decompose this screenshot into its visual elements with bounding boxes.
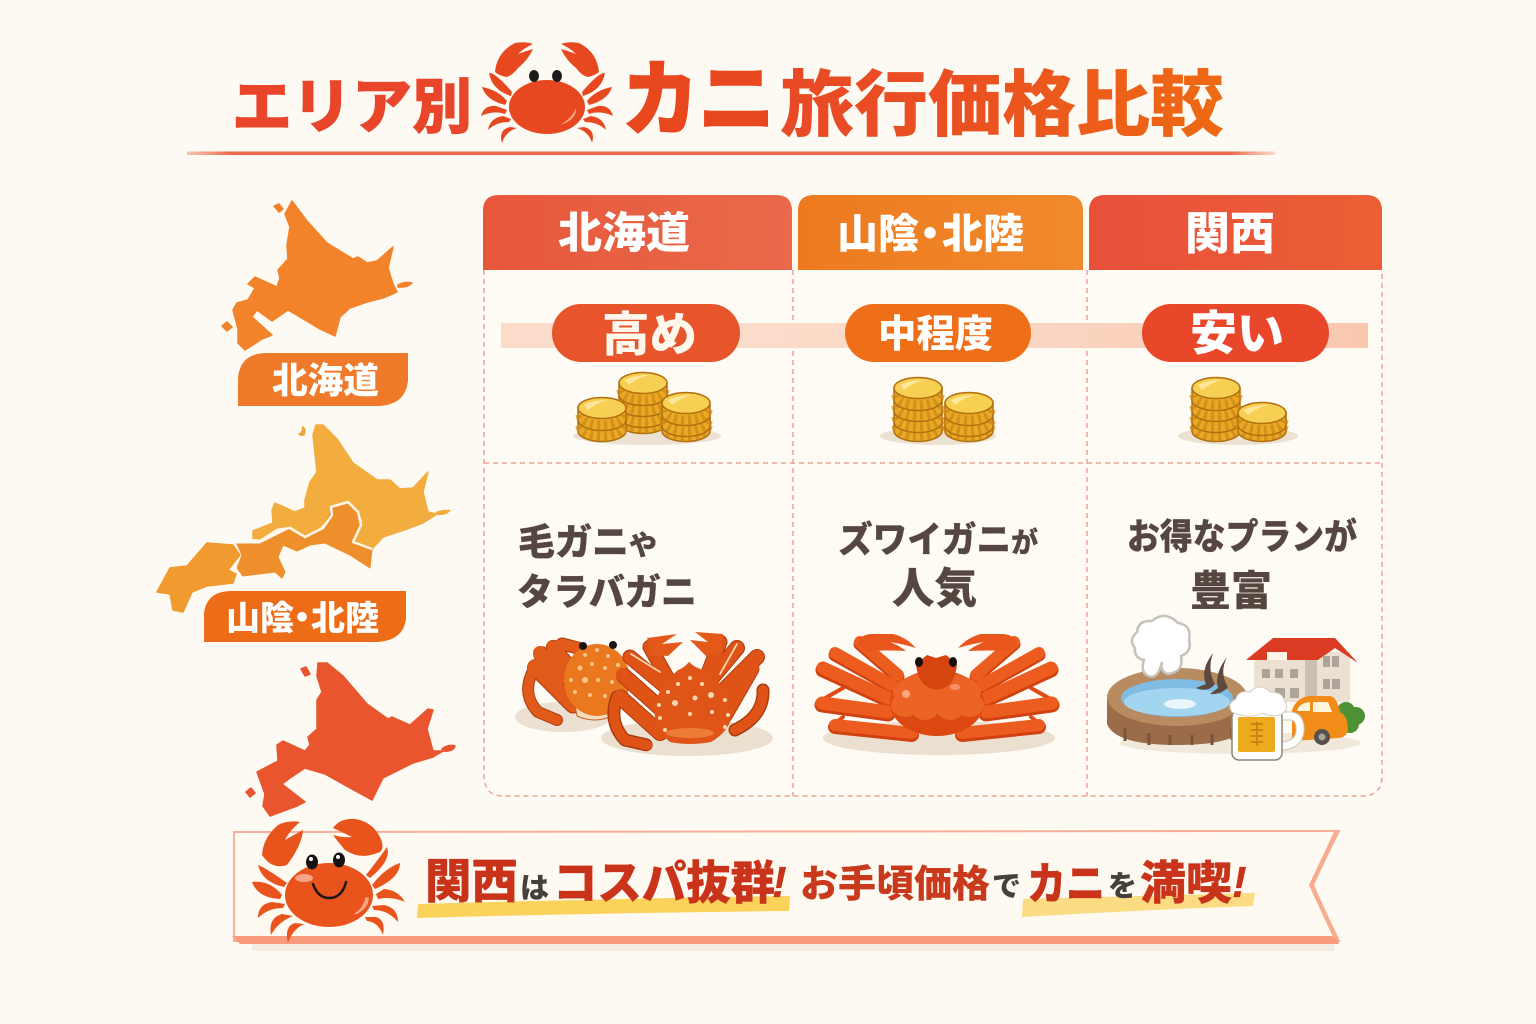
price pill: high: 高め (602, 308, 697, 361)
title text: kani: カニ (622, 55, 775, 146)
text: plans: お得なプランが (1127, 516, 1357, 557)
icon: coins high (573, 372, 721, 445)
label: Hokkaido (238, 353, 408, 406)
price pill: medium: 中程度 (878, 314, 993, 356)
banner lower edge (232, 936, 1339, 944)
comparison table (483, 195, 1382, 796)
title text: area: エリア別 (232, 74, 472, 141)
label: San'in Hokuriku (204, 591, 406, 642)
price pill: low: 安い (1190, 307, 1284, 360)
banner message: 満喫 (1140, 857, 1232, 909)
price pill: low (1142, 304, 1329, 362)
left crab legs (528, 644, 578, 720)
price pill: high (552, 304, 740, 362)
map: San'in and Hokuriku (157, 425, 451, 612)
text: kegani taraba (517, 522, 697, 613)
title rule (187, 152, 1275, 155)
title (187, 42, 1275, 155)
illustration: snow crab (820, 634, 1055, 755)
text: plans (1127, 516, 1357, 614)
header: Kansai: 関西 (1185, 208, 1275, 259)
banner shadow (252, 943, 1334, 951)
illustration: king crabs (515, 632, 773, 756)
banner (232, 819, 1339, 951)
banner message: ! (1232, 858, 1247, 907)
header: Hokkaido: 北海道 (558, 210, 690, 258)
price pill: medium (845, 304, 1031, 362)
highlight: kansai value (417, 896, 790, 918)
label: Hokkaido: 北海道 (272, 360, 379, 401)
column dividers (484, 270, 1382, 796)
hot spring tub (1107, 668, 1247, 745)
banner message: 関西 (425, 855, 518, 908)
hot spring rocks (1196, 653, 1228, 694)
text: zuwai: 人気 (892, 565, 977, 612)
icon: coins medium (880, 378, 996, 445)
text: kegani taraba: タラバガニ (517, 572, 697, 613)
banner message: ! (772, 858, 787, 907)
inn building (1246, 638, 1358, 702)
banner message: で (992, 871, 1021, 903)
map: Kansai (246, 663, 455, 816)
banner right edge (1309, 831, 1339, 941)
label: San'in Hokuriku: 山陰 (226, 600, 294, 638)
banner message: カニ (1027, 860, 1105, 909)
banner ribbon (234, 831, 1339, 941)
text: kegani taraba: 毛ガニや (518, 522, 657, 563)
header: San'in Hokuriku (798, 195, 1083, 270)
icon: title crab (481, 42, 613, 143)
header: Kansai (1089, 195, 1382, 270)
price band (501, 323, 1368, 348)
right crab legs (614, 642, 763, 745)
text: plans: 豊富 (1190, 568, 1272, 614)
bush (1337, 702, 1365, 733)
text: zuwai: ズワイガニが (838, 519, 1038, 560)
icon: coins low (1178, 378, 1298, 445)
text: zuwai (838, 519, 1038, 612)
banner message: お手頃価格 (800, 864, 990, 906)
table body frame (484, 270, 1382, 796)
map: Hokkaido (222, 201, 412, 350)
banner message (425, 855, 1247, 909)
car (1292, 696, 1348, 745)
beer mug (1230, 687, 1300, 760)
banner message: を (1108, 871, 1137, 903)
label: San'in Hokuriku: 北陸 (311, 600, 379, 638)
highlight: crab enjoy (1022, 893, 1255, 917)
banner message: コスパ抜群 (553, 857, 775, 909)
title text: price comparison: 旅行価格比較 (780, 66, 1224, 146)
header: San'in Hokuriku: 山陰 (837, 211, 919, 257)
header: San'in Hokuriku: ・ (910, 211, 950, 257)
mascot crab (252, 819, 405, 943)
steam (1132, 616, 1190, 677)
header: San'in Hokuriku: 北陸 (942, 211, 1024, 257)
banner message: は (520, 873, 549, 905)
label: San'in Hokuriku: ・ (285, 600, 319, 638)
header: Hokkaido (483, 195, 792, 270)
illustration: onsen, inn, beer and car (1107, 616, 1365, 760)
